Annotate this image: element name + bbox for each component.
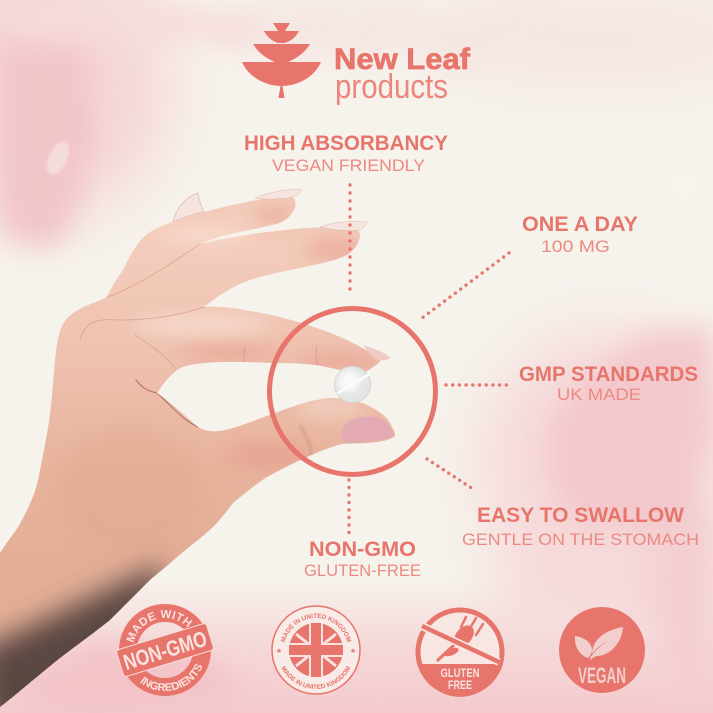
lower band — [419, 664, 501, 697]
dotted connector: lower right — [427, 459, 473, 489]
callout: gmp standards: UK MADE — [557, 385, 641, 404]
badge: made in united kingdom — [271, 605, 361, 695]
union flag — [289, 623, 343, 677]
badge label: VEGAN — [578, 663, 626, 688]
dotted connector: top — [348, 185, 352, 297]
middle nail — [320, 221, 367, 230]
stars: ★ — [350, 647, 356, 655]
callout: high absorbancy — [244, 132, 448, 175]
stars: ★ — [276, 647, 282, 655]
dotted connector: bottom — [347, 480, 351, 540]
pill — [334, 366, 370, 402]
leaf icon — [575, 627, 623, 660]
callout: one a day: 100 MG — [541, 237, 610, 256]
callout: easy to swallow: GENTLE ON THE STOMACH — [462, 530, 699, 549]
badge curved text: MADE WITH — [126, 610, 192, 642]
curved text — [280, 614, 352, 689]
logo mark: tiered leaf — [242, 23, 321, 98]
badge: non-gmo — [116, 604, 213, 696]
arm underside shadow — [0, 565, 165, 713]
logo wordmark: New Leaf — [334, 43, 471, 76]
thumb knuckle crease — [300, 425, 311, 456]
paper highlights — [42, 138, 703, 199]
badge label — [440, 668, 480, 692]
badge: vegan — [559, 607, 645, 693]
badge label: FREE — [448, 680, 472, 692]
logo — [242, 23, 471, 106]
finger tip reds — [180, 208, 385, 465]
callout: gmp standards — [519, 363, 698, 404]
index nail — [363, 345, 391, 360]
callout: non-gmo — [304, 538, 421, 580]
logo wordmark: products — [335, 68, 448, 106]
curved text: MADE IN UNITED KINGDOM — [280, 614, 352, 642]
finger separations and creases — [80, 244, 318, 368]
ring nail — [255, 189, 302, 199]
badge: gluten free — [418, 610, 502, 697]
callout: high absorbancy: HIGH ABSORBANCY — [244, 132, 448, 155]
callout: easy to swallow: EASY TO SWALLOW — [477, 504, 684, 527]
callout: easy to swallow — [462, 504, 699, 549]
focus circle — [270, 308, 436, 474]
curved text: MADE IN UNITED KINGDOM — [282, 666, 350, 689]
palm warm tone — [106, 440, 150, 452]
hand silhouette with shading — [0, 180, 400, 713]
badge curved text: INGREDIENTS — [140, 664, 202, 692]
finger highlights — [130, 228, 365, 414]
callout: non-gmo: NON-GMO — [309, 538, 416, 561]
badge curved text — [126, 610, 202, 692]
thumb nail — [342, 417, 395, 443]
wheat icon — [437, 617, 483, 661]
callout: high absorbancy: VEGAN FRIENDLY — [272, 156, 425, 175]
badge label: GLUTEN — [440, 668, 480, 680]
callout: one a day — [522, 213, 638, 256]
stars — [276, 647, 356, 655]
dotted connector: upper right — [418, 253, 509, 321]
prohibition slash — [422, 626, 499, 662]
web crease — [136, 380, 198, 427]
bottom pink wash — [0, 580, 713, 713]
pinky nail — [173, 193, 204, 222]
callout: non-gmo: GLUTEN-FREE — [304, 561, 421, 580]
badge banner: NON-GMO — [120, 626, 210, 675]
callout: one a day: ONE A DAY — [522, 213, 638, 236]
dotted connector: right — [446, 383, 507, 387]
logo wordmark — [334, 43, 471, 106]
callout: gmp standards: GMP STANDARDS — [519, 363, 698, 386]
hand — [0, 180, 400, 713]
